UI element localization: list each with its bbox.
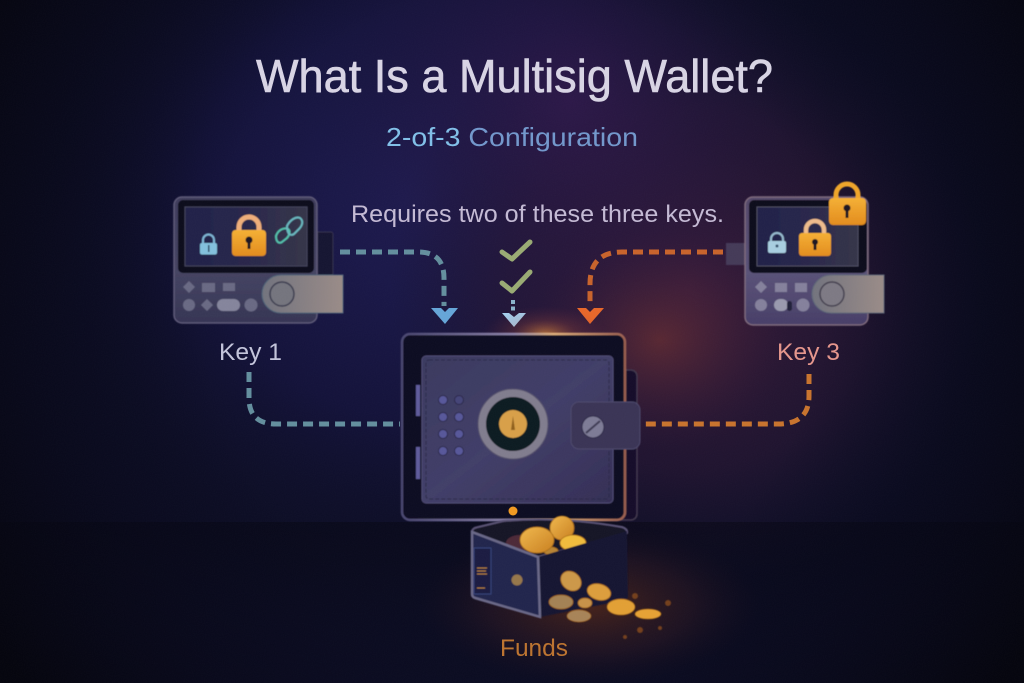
hinges — [416, 385, 420, 416]
arrow: key 3 to wallet — [577, 252, 723, 324]
keypad dots — [438, 396, 464, 456]
device screen — [178, 200, 314, 273]
chest front left — [472, 532, 540, 617]
label: funds: Funds — [500, 635, 568, 662]
usb stick — [812, 275, 884, 313]
label: key 1: Key 1 — [219, 339, 282, 366]
icon: gold lock — [232, 217, 266, 256]
panel: wallet safe — [402, 334, 640, 520]
chest front right — [538, 531, 628, 617]
clasp — [571, 402, 640, 449]
subtitle: 2-of-3 Configuration — [386, 122, 638, 152]
side tab — [726, 243, 746, 265]
outer frame — [402, 334, 625, 520]
icon: small pale lock — [768, 233, 786, 253]
sparks — [623, 593, 671, 639]
connector: key 3 to wallet — [641, 374, 809, 424]
label: key 3: Key 3 — [777, 339, 840, 366]
orange dot — [508, 506, 518, 516]
icon: small blue lock — [200, 234, 217, 254]
icon: check mark 2 — [502, 272, 530, 291]
panel: funds chest — [472, 516, 671, 639]
icon: chain link — [276, 217, 302, 243]
requirement text: Requires two of these three keys. — [351, 201, 724, 228]
device buttons — [755, 281, 810, 312]
icon: large corner lock — [829, 184, 866, 225]
device screen — [749, 200, 867, 273]
device buttons — [183, 281, 258, 312]
panel: key 3 hardware wallet — [726, 184, 884, 325]
arrow: key 1 to wallet — [340, 252, 458, 324]
title: What Is a Multisig Wallet? — [256, 50, 773, 102]
spilled coins — [549, 567, 661, 622]
panel: key 1 hardware wallet — [174, 197, 343, 323]
usb stick — [262, 275, 343, 313]
connector: key 1 to wallet — [249, 372, 400, 424]
coins in chest — [520, 516, 586, 555]
icon: gold lock — [799, 221, 831, 256]
glow around chest — [420, 525, 760, 683]
arrow: centre to wallet — [502, 300, 526, 327]
device body — [174, 197, 317, 323]
back flap — [610, 370, 637, 520]
leather front — [422, 356, 613, 503]
icon: check mark 1 — [502, 242, 530, 259]
device body — [745, 197, 868, 325]
dial — [478, 389, 548, 459]
chest interior — [472, 519, 627, 557]
glow above wallet — [483, 306, 607, 362]
